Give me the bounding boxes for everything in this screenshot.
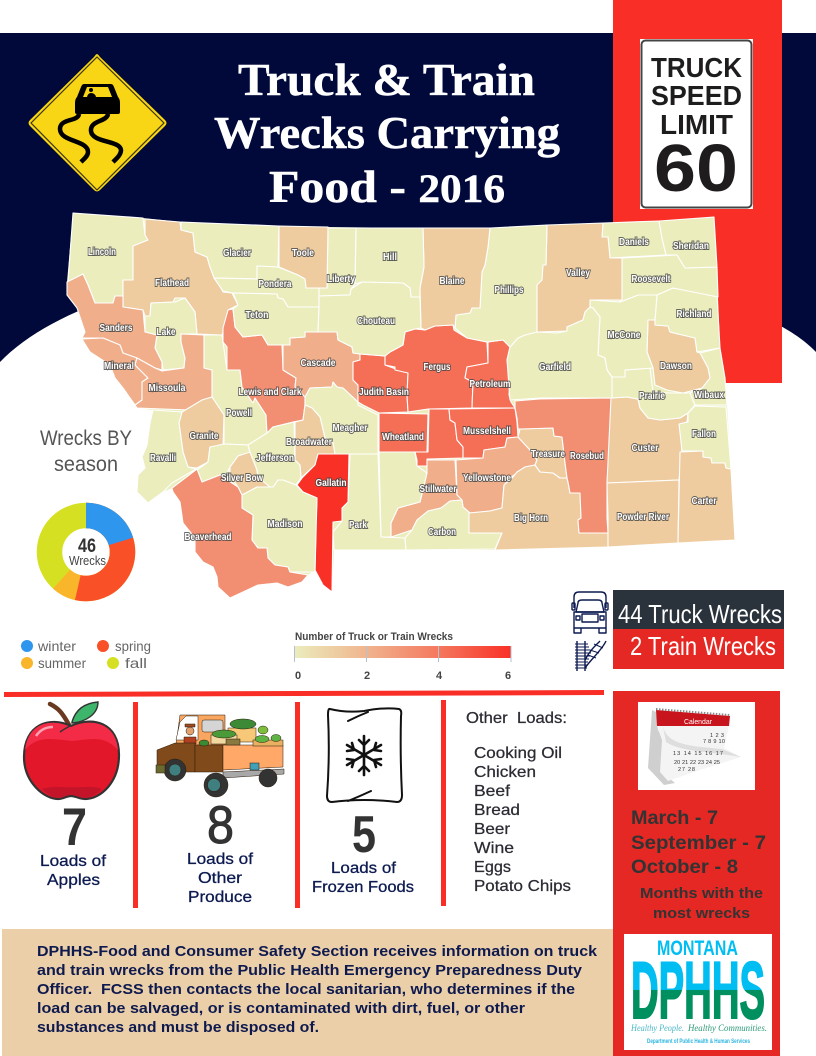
panel: description: substances and must be disposed of. [37,1019,319,1036]
county labels: Lewis and Clark [238,387,302,398]
legend: seasons [21,638,151,671]
legend: number of truck or train wrecks: 2 [364,670,370,682]
county labels: Wibaux [694,390,724,401]
panel: description [2,929,613,1056]
legend: seasons: fall [125,655,147,671]
legend: number of truck or train wrecks: 4 [436,670,443,682]
county labels: Cascade [300,358,336,369]
county labels: Fallon [692,429,716,440]
icon: calendar: 1 2 3 [710,733,724,739]
county labels: Richland [676,309,712,320]
icon: apple [24,702,119,799]
text block: other loads [466,710,571,895]
legend: number of truck or train wrecks: 0 [295,670,301,682]
county labels: Big Horn [514,513,548,524]
panel: loads of frozen foods [312,708,414,896]
county shapes [67,213,735,598]
legend: seasons: summer [38,655,86,671]
title: Wrecks Carrying [214,107,560,158]
text block: other loads: Eggs [474,859,511,876]
panel: months with the most wrecks [613,691,780,1056]
callout: train wrecks count [613,629,784,669]
county labels: Ravalli [150,453,176,464]
panel: loads of apples: 7 [62,798,87,857]
panel: loads of frozen foods: Loads of [331,860,397,877]
icon: produce truck [156,715,284,797]
heading: wrecks by season [40,427,132,476]
panel: description: Officer. FCSS then contacts the local sanitarian, who determines if the [37,981,575,998]
title [214,54,560,212]
county labels: Musselshell [463,426,511,437]
county labels: Powell [226,408,252,419]
county labels: Flathead [155,278,189,289]
county labels: Madison [268,519,302,530]
donut chart: wrecks by season [50,516,122,588]
county labels: Petroleum [470,379,511,390]
county labels: Lake [156,327,176,338]
county labels: Powder River [617,512,669,523]
county labels: Toole [292,248,314,259]
text block: other loads: Cooking Oil [474,745,562,762]
panel: loads of apples: Loads of [40,853,107,870]
county labels: Mineral [104,361,134,372]
county labels: Valley [566,268,590,279]
panel: loads of apples [24,702,119,889]
panel: months with the most wrecks: October - 8 [631,857,738,878]
county labels: Yellowstone [463,473,511,484]
county labels: Hill [383,252,397,263]
county labels: Dawson [660,361,692,372]
heading: wrecks by season: Wrecks BY [40,427,132,450]
county labels: Pondera [258,279,292,290]
county labels: Beaverhead [184,532,232,543]
title: Truck & Train [238,54,535,105]
text block: other loads: Other Loads: [466,710,567,727]
logo: Montana DPHHS: Healthy Communities. [687,1023,767,1033]
county labels: Daniels [619,237,649,248]
legend: number of truck or train wrecks [294,631,511,682]
text block: other loads: Chicken [474,764,536,781]
icon: calendar: Calendar [684,719,713,726]
county labels: Judith Basin [359,387,409,398]
header background [0,33,816,362]
title: Food - 2016 [269,161,505,212]
heading: wrecks by season: season [54,453,118,476]
county labels: Rosebud [570,451,604,462]
county labels: Meagher [332,423,368,434]
icon: calendar: 20 21 22 23 24 25 [674,760,720,766]
logo: Montana DPHHS: MONTANA [657,937,738,960]
logo: Montana DPHHS: Healthy People. [630,1023,684,1033]
county labels: Phillips [494,285,524,296]
county labels: Broadwater [286,437,332,448]
icon: calendar: 27 28 [678,767,695,773]
county labels: Lincoln [88,247,116,258]
panel: loads of other produce: Produce [188,889,252,906]
icon: truck speed limit sign: LIMIT [660,109,733,140]
county labels: Blaine [440,276,465,287]
text block: other loads: Potato Chips [474,878,571,895]
county labels: Gallatin [316,478,346,489]
county labels: Garfield [539,362,571,373]
legend: seasons: winter [37,638,76,654]
logo: Montana DPHHS: Department of Public Health & Human Services [647,1039,751,1045]
panel: months with the most wrecks: March - 7 [631,808,718,829]
legend: seasons: spring [115,638,151,654]
county labels: Granite [190,431,219,442]
logo: Montana DPHHS [624,934,772,1050]
panel: loads of frozen foods: 5 [352,806,376,864]
county labels: Treasure [531,449,565,460]
panel: description: load can be salvaged, or is contaminated with dirt, fuel, or other [37,1000,525,1017]
icon: truck speed limit sign: SPEED [651,80,742,111]
donut chart: wrecks by season: Wrecks [69,553,106,568]
text block: other loads: Bread [474,802,520,819]
legend: number of truck or train wrecks: Number of Truck or Train Wrecks [295,631,453,643]
icon: calendar [638,702,755,790]
icon: truck speed limit sign [640,39,753,209]
panel: months with the most wrecks: most wrecks [653,905,750,922]
text block: other loads: Beef [474,783,511,800]
panel: months with the most wrecks: September - 7 [631,833,766,854]
panel: months with the most wrecks: Months with the [640,885,763,902]
map: Montana counties by number of wrecks [67,213,735,598]
callout: train wrecks count: 2 Train Wrecks [630,631,776,661]
county labels: Carbon [428,527,456,538]
icon: calendar: 13 14 15 16 17 [673,751,723,757]
panel: loads of other produce: Other [198,870,243,887]
icon: truck speed limit sign: TRUCK [651,52,742,83]
panel: loads of frozen foods: Frozen Foods [312,879,414,896]
panel: description: DPHHS-Food and Consumer Safety Section receives information on truck [37,943,598,960]
callout: truck wrecks count [613,590,784,629]
county labels: Park [349,520,367,531]
county labels: Roosevelt [632,274,671,285]
icon: slippery road sign [28,54,166,192]
county labels: Custer [632,443,659,454]
county labels: Missoula [148,383,186,394]
county labels: Glacier [223,248,251,259]
panel: loads of other produce: Loads of [187,851,254,868]
icon: truck speed limit sign: 60 [654,131,738,206]
panel: loads of apples: Apples [47,872,100,889]
county labels: McCone [608,330,641,341]
legend: number of truck or train wrecks: 6 [505,670,511,682]
panel: description: and train wrecks from the Public Health Emergency Preparedness Duty [37,962,583,979]
county labels: Jefferson [256,453,294,464]
text block: other loads: Wine [474,840,514,857]
county labels: Carter [692,496,717,507]
county labels: Wheatland [382,432,424,443]
text block: other loads: Beer [474,821,511,838]
icon: frozen package with snowflake [327,708,402,802]
county labels: Teton [246,310,268,321]
county labels [88,237,724,543]
county labels: Sheridan [673,241,709,252]
county labels: Liberty [327,274,355,285]
panel: loads of other produce: 8 [207,796,234,855]
icon: truck [572,592,608,633]
panel: loads of other produce [156,715,284,906]
county labels: Prairie [639,391,665,402]
callout: truck wrecks count: 44 Truck Wrecks [618,599,782,629]
county labels: Stillwater [420,484,457,495]
county labels: Sanders [100,323,133,334]
icon: calendar: 7 8 9 10 [703,739,725,745]
county labels: Silver Bow [221,473,263,484]
county labels: Fergus [424,362,451,373]
icon: railroad track switch [575,641,606,671]
county labels: Chouteau [357,316,395,327]
donut chart: wrecks by season: 46 [78,536,96,557]
red header panel [613,0,782,383]
